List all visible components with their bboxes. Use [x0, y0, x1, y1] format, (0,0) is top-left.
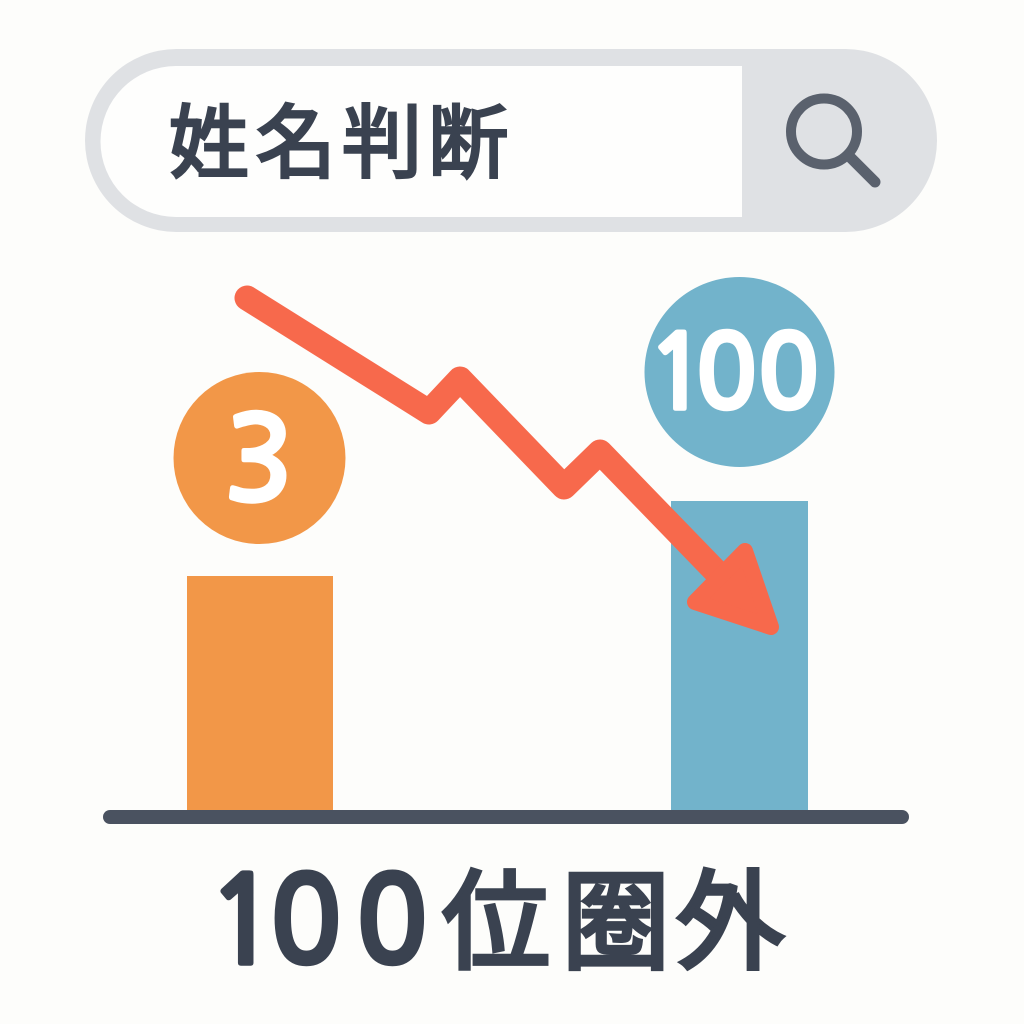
search query text: 姓名判断 — [169, 79, 508, 195]
bar: rank 100 — [671, 501, 808, 811]
badge: rank 100: 100 — [646, 323, 820, 425]
badge: rank 3: 3 — [223, 402, 295, 519]
badge: rank 100 — [644, 277, 834, 467]
search bar — [85, 49, 937, 232]
caption: 100 — [206, 862, 429, 983]
caption — [206, 836, 784, 992]
icon: magnifying glass — [791, 98, 875, 182]
baseline axis — [103, 810, 909, 824]
arrow: falling rank — [247, 298, 771, 627]
bar: rank 3 — [187, 576, 333, 811]
caption: 位圈外 — [442, 836, 784, 992]
badge: rank 3 — [174, 372, 346, 544]
